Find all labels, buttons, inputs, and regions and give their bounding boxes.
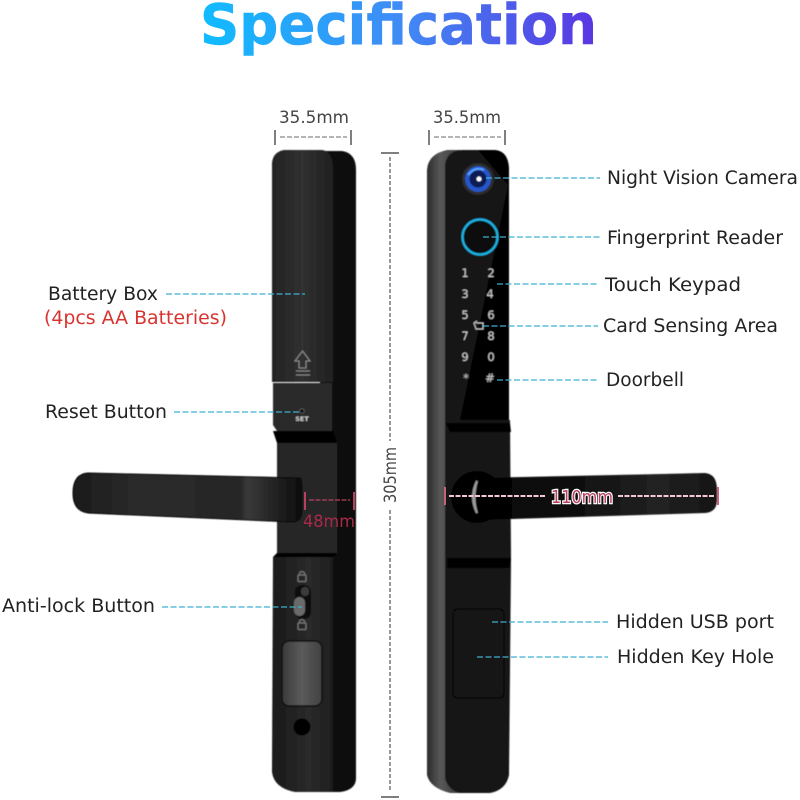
dimension: left width — [275, 108, 351, 145]
dimension: right width: 35.5mm — [433, 108, 501, 128]
keypad digits — [461, 266, 495, 385]
dimension: right width — [429, 108, 505, 145]
fingerprint reader — [462, 220, 498, 254]
label: hidden usb port: Hidden USB port — [616, 612, 774, 633]
keypad digits: 9 — [461, 350, 469, 364]
label: fingerprint reader: Fingerprint Reader — [607, 228, 783, 249]
lock side edge — [320, 151, 356, 792]
dimension: handle offset: 48mm — [303, 512, 355, 532]
keypad digits: * — [463, 371, 469, 385]
camera — [462, 163, 494, 195]
dimension: height — [381, 153, 401, 797]
arrow base lines — [296, 371, 310, 375]
label: card sensing area: Card Sensing Area — [603, 316, 778, 337]
keypad digits: 8 — [487, 329, 495, 343]
reset panel: SET — [295, 415, 309, 423]
keypad digits: 5 — [461, 308, 469, 322]
reset panel — [273, 383, 332, 431]
mount plate — [445, 420, 511, 793]
handle mount plate — [277, 443, 337, 553]
label: night vision camera: Night Vision Camera — [607, 168, 798, 189]
dimension: handle offset — [303, 492, 355, 532]
icon: lock symbols — [298, 572, 306, 630]
right lock: front view — [427, 150, 717, 793]
leader lines — [162, 178, 608, 657]
gray side edge — [427, 150, 460, 793]
dimension: left width: 35.5mm — [279, 108, 349, 128]
hidden cover — [453, 609, 504, 698]
keypad digits: 0 — [487, 350, 495, 364]
keypad digits: 7 — [461, 329, 469, 343]
label: battery box: Battery Box — [48, 284, 158, 305]
icon: card sensing — [474, 321, 483, 329]
lower panel — [272, 557, 333, 792]
keypad digits: 1 — [461, 266, 469, 280]
anti-lock slide switch — [294, 585, 311, 619]
left lock: back view — [73, 150, 356, 792]
keypad digits: 2 — [487, 266, 495, 280]
knob — [451, 471, 503, 523]
label: touch keypad: Touch Keypad — [604, 275, 741, 296]
keypad digits: 3 — [461, 287, 469, 301]
label: hidden key hole: Hidden Key Hole — [617, 647, 774, 668]
keypad digits: 4 — [486, 287, 494, 301]
label: reset button: Reset Button — [45, 402, 167, 423]
keypad face — [445, 150, 509, 420]
icon: upward arrow — [295, 351, 310, 368]
keypad digits: # — [485, 371, 495, 385]
glossy reflection — [445, 150, 508, 420]
label: doorbell: Doorbell — [606, 370, 684, 391]
handle — [73, 473, 302, 522]
window — [282, 641, 322, 706]
dimension: height: 305mm — [381, 447, 401, 503]
battery cover — [272, 150, 344, 382]
dimension: handle length: 110mm — [551, 487, 613, 508]
dimension: handle length — [445, 487, 718, 508]
label: anti-lock button: Anti-lock Button — [2, 596, 155, 617]
key hole — [294, 718, 310, 736]
keypad digits: 6 — [487, 308, 495, 322]
handle — [480, 473, 717, 520]
label: battery note: (4pcs AA Batteries) — [44, 308, 227, 329]
